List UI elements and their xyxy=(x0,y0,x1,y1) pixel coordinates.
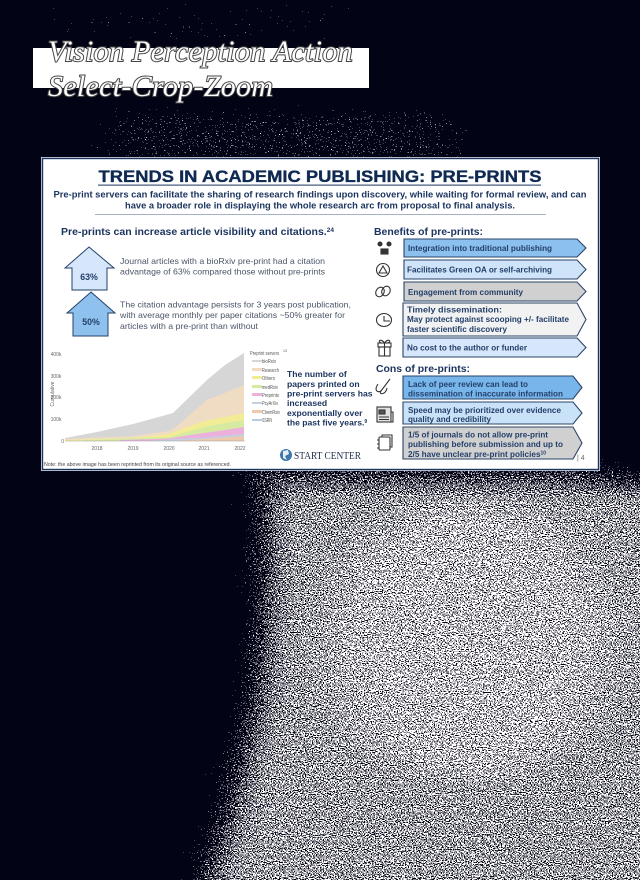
icon: notebook xyxy=(377,435,392,450)
chart: cumulative preprints stacked area: 300k xyxy=(51,374,62,380)
chart legend: 13 xyxy=(283,349,287,353)
chart legend: Others xyxy=(262,376,275,382)
chart callout text: exponentially over xyxy=(287,408,363,418)
con: journals policies: 1/5 of journals do not allow pre-print xyxy=(408,430,548,440)
chart callout text: increased xyxy=(287,398,327,408)
icon: linked rings xyxy=(374,285,392,298)
chart: cumulative preprints stacked area: 100k xyxy=(51,417,62,423)
chart: cumulative preprints stacked area: 0 xyxy=(61,439,64,445)
chart legend xyxy=(250,349,287,424)
chart: cumulative preprints stacked area: Cumulative xyxy=(50,381,56,407)
arrow: 63% xyxy=(65,247,114,290)
chart legend: Research xyxy=(262,368,279,374)
left heading: 24 xyxy=(327,228,335,234)
con: lack of peer review: Lack of peer review can lead to xyxy=(408,379,528,389)
panel: slide xyxy=(41,157,600,471)
benefit: green OA xyxy=(404,260,586,279)
chart callout text xyxy=(287,369,373,428)
source note: Note: the above image has been reprinted from its original source as referenced. xyxy=(44,462,231,468)
benefit: green OA: Facilitates Green OA or self-archiving xyxy=(407,264,552,274)
chart legend: Preprints xyxy=(262,393,279,399)
text: citation advantage 63%: Journal articles with a bioRxiv pre-print had a citation xyxy=(120,256,325,266)
heading: Vision Perception Action: Vision Perception Action xyxy=(48,35,353,68)
benefit: timely dissemination: Timely dissemination: xyxy=(407,304,502,314)
text: citation advantage 50%: articles with a pre-print than without xyxy=(120,321,259,331)
page number: | 4 xyxy=(577,455,585,462)
benefit: integration: Integration into traditional publishing xyxy=(408,243,552,253)
chart callout text: pre-print servers has xyxy=(287,388,373,398)
arrow: 63%: 63% xyxy=(80,272,98,282)
intro text xyxy=(54,190,587,210)
con: journals policies: 2/5 have unclear pre-print policies xyxy=(408,449,542,459)
chart legend: ChemRxiv xyxy=(262,410,280,416)
chart legend: medRxiv xyxy=(262,385,278,391)
logo: Start Center xyxy=(280,449,361,462)
con: speed xyxy=(403,402,582,424)
icon: people network xyxy=(378,242,391,254)
intro text: have a broader role in displaying the whole research arc from proposal to final analysis. xyxy=(125,200,515,210)
benefit: timely dissemination xyxy=(403,303,586,336)
heading: Select-Crop-Zoom: Select-Crop-Zoom xyxy=(48,70,273,103)
arrow: 50% xyxy=(67,292,115,336)
icon: paperclip pen xyxy=(376,379,390,394)
chart callout text: 9 xyxy=(364,419,367,425)
text: citation advantage 63% xyxy=(120,256,325,276)
icon: newspaper xyxy=(377,407,393,422)
chart: cumulative preprints stacked area: 2022 xyxy=(234,446,246,452)
con: lack of peer review xyxy=(403,376,582,399)
chart: cumulative preprints stacked area: 2020 xyxy=(163,446,175,452)
text: citation advantage 50% xyxy=(119,300,351,331)
icon: recycle circle xyxy=(376,264,390,276)
heading box: white band xyxy=(33,48,369,88)
chart: cumulative preprints stacked area: 2019 xyxy=(127,446,139,452)
chart: cumulative preprints stacked area: 400k xyxy=(51,352,62,358)
chart: cumulative preprints stacked area: 200k xyxy=(51,395,62,401)
con: speed: Speed may be prioritized over evidence xyxy=(408,405,561,415)
benefit: timely dissemination: May protect against scooping +/- facilitate xyxy=(407,314,569,324)
slide title: TRENDS IN ACADEMIC PUBLISHING: PRE-PRINTS xyxy=(98,168,542,186)
chart legend: bioRxiv xyxy=(262,359,276,365)
con: lack of peer review: dissemination of inaccurate information xyxy=(408,388,563,398)
benefit: no cost xyxy=(403,338,586,357)
text: citation advantage 63%: advantage of 63% compared those without pre-prints xyxy=(120,266,325,276)
chart: cumulative preprints stacked area xyxy=(50,352,246,452)
cons heading: Cons of pre-prints: xyxy=(376,364,470,375)
benefits heading: Benefits of pre-prints: xyxy=(374,227,483,238)
text: citation advantage 50%: The citation advantage persists for 3 years post publication, xyxy=(120,300,351,310)
logo: Start Center: START CENTER xyxy=(294,451,361,462)
icon: clock xyxy=(376,314,392,326)
benefit: engagement xyxy=(404,282,586,301)
con: journals policies: publishing before submission and up to xyxy=(408,439,563,449)
icon: gift xyxy=(378,340,391,356)
chart legend: SSRN xyxy=(262,418,272,424)
benefit: timely dissemination: faster scientific discovery xyxy=(407,324,507,334)
benefit: engagement: Engagement from community xyxy=(408,287,523,297)
con: speed: quality and credibility xyxy=(408,414,491,424)
chart legend: Preprint servers xyxy=(250,351,279,357)
chart callout text: papers printed on xyxy=(287,379,360,389)
chart legend: PsyArXiv xyxy=(262,401,278,407)
left heading: Pre-prints can increase article visibility and citations. xyxy=(61,227,306,238)
benefit: integration xyxy=(404,239,586,257)
chart callout text: the past five years. xyxy=(287,418,364,428)
chart callout text: The number of xyxy=(287,369,347,379)
arrow: 50%: 50% xyxy=(82,317,100,327)
chart: cumulative preprints stacked area: 2018 xyxy=(91,446,103,452)
con: journals policies: 10 xyxy=(541,450,546,456)
text: citation advantage 50%: with average monthly per paper citations ~50% greater for xyxy=(119,310,345,320)
chart: cumulative preprints stacked area: 2021 xyxy=(198,446,210,452)
intro text: Pre-print servers can facilitate the sharing of research findings upon discovery, while waiting for formal review, and can xyxy=(54,190,587,200)
con: journals policies xyxy=(403,427,582,459)
benefit: no cost: No cost to the author or funder xyxy=(407,342,528,352)
